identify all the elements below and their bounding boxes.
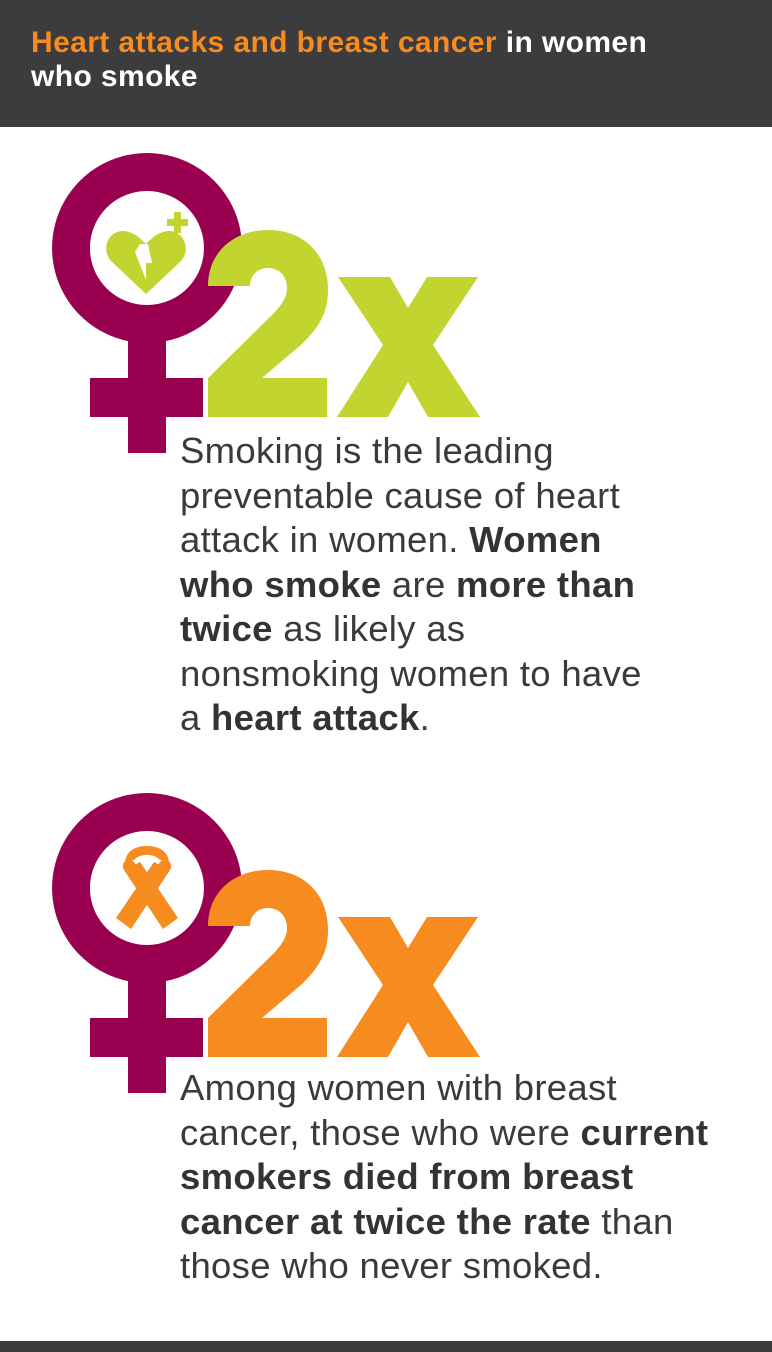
icon: female symbol [52, 153, 242, 453]
text block: breast cancer: those who never smoked. [180, 1245, 603, 1286]
text block: heart attack: who smoke are more than [180, 564, 635, 604]
text block: heart attack: a heart attack. [180, 697, 430, 738]
title: Heart attacks and breast cancer in women [31, 26, 647, 59]
text block: heart attack: nonsmoking women to have [180, 652, 642, 694]
footer bar [0, 1341, 772, 1352]
text block: heart attack: Smoking is the leading [180, 430, 554, 471]
big number 2x [208, 230, 480, 417]
header bar [0, 0, 772, 127]
text block: heart attack [180, 430, 642, 738]
icon: broken heart with plus [106, 212, 188, 294]
text block: breast cancer [180, 1067, 708, 1286]
text block: heart attack: preventable cause of heart [180, 474, 620, 516]
text block: breast cancer: Among women with breast [180, 1067, 617, 1108]
icon: female symbol [52, 793, 242, 1093]
text block: breast cancer: cancer at twice the rate than [180, 1200, 674, 1242]
title [30, 26, 647, 93]
icon: awareness ribbon [116, 846, 178, 929]
text block: heart attack: twice as likely as [180, 608, 465, 649]
text block: heart attack: attack in women. Women [180, 519, 602, 560]
text block: breast cancer: cancer, those who were current [180, 1112, 708, 1152]
title: who smoke [31, 60, 198, 93]
graphic: heart attack 2x [52, 153, 480, 453]
big number 2x [208, 870, 480, 1057]
text block: breast cancer: smokers died from breast [180, 1156, 633, 1197]
